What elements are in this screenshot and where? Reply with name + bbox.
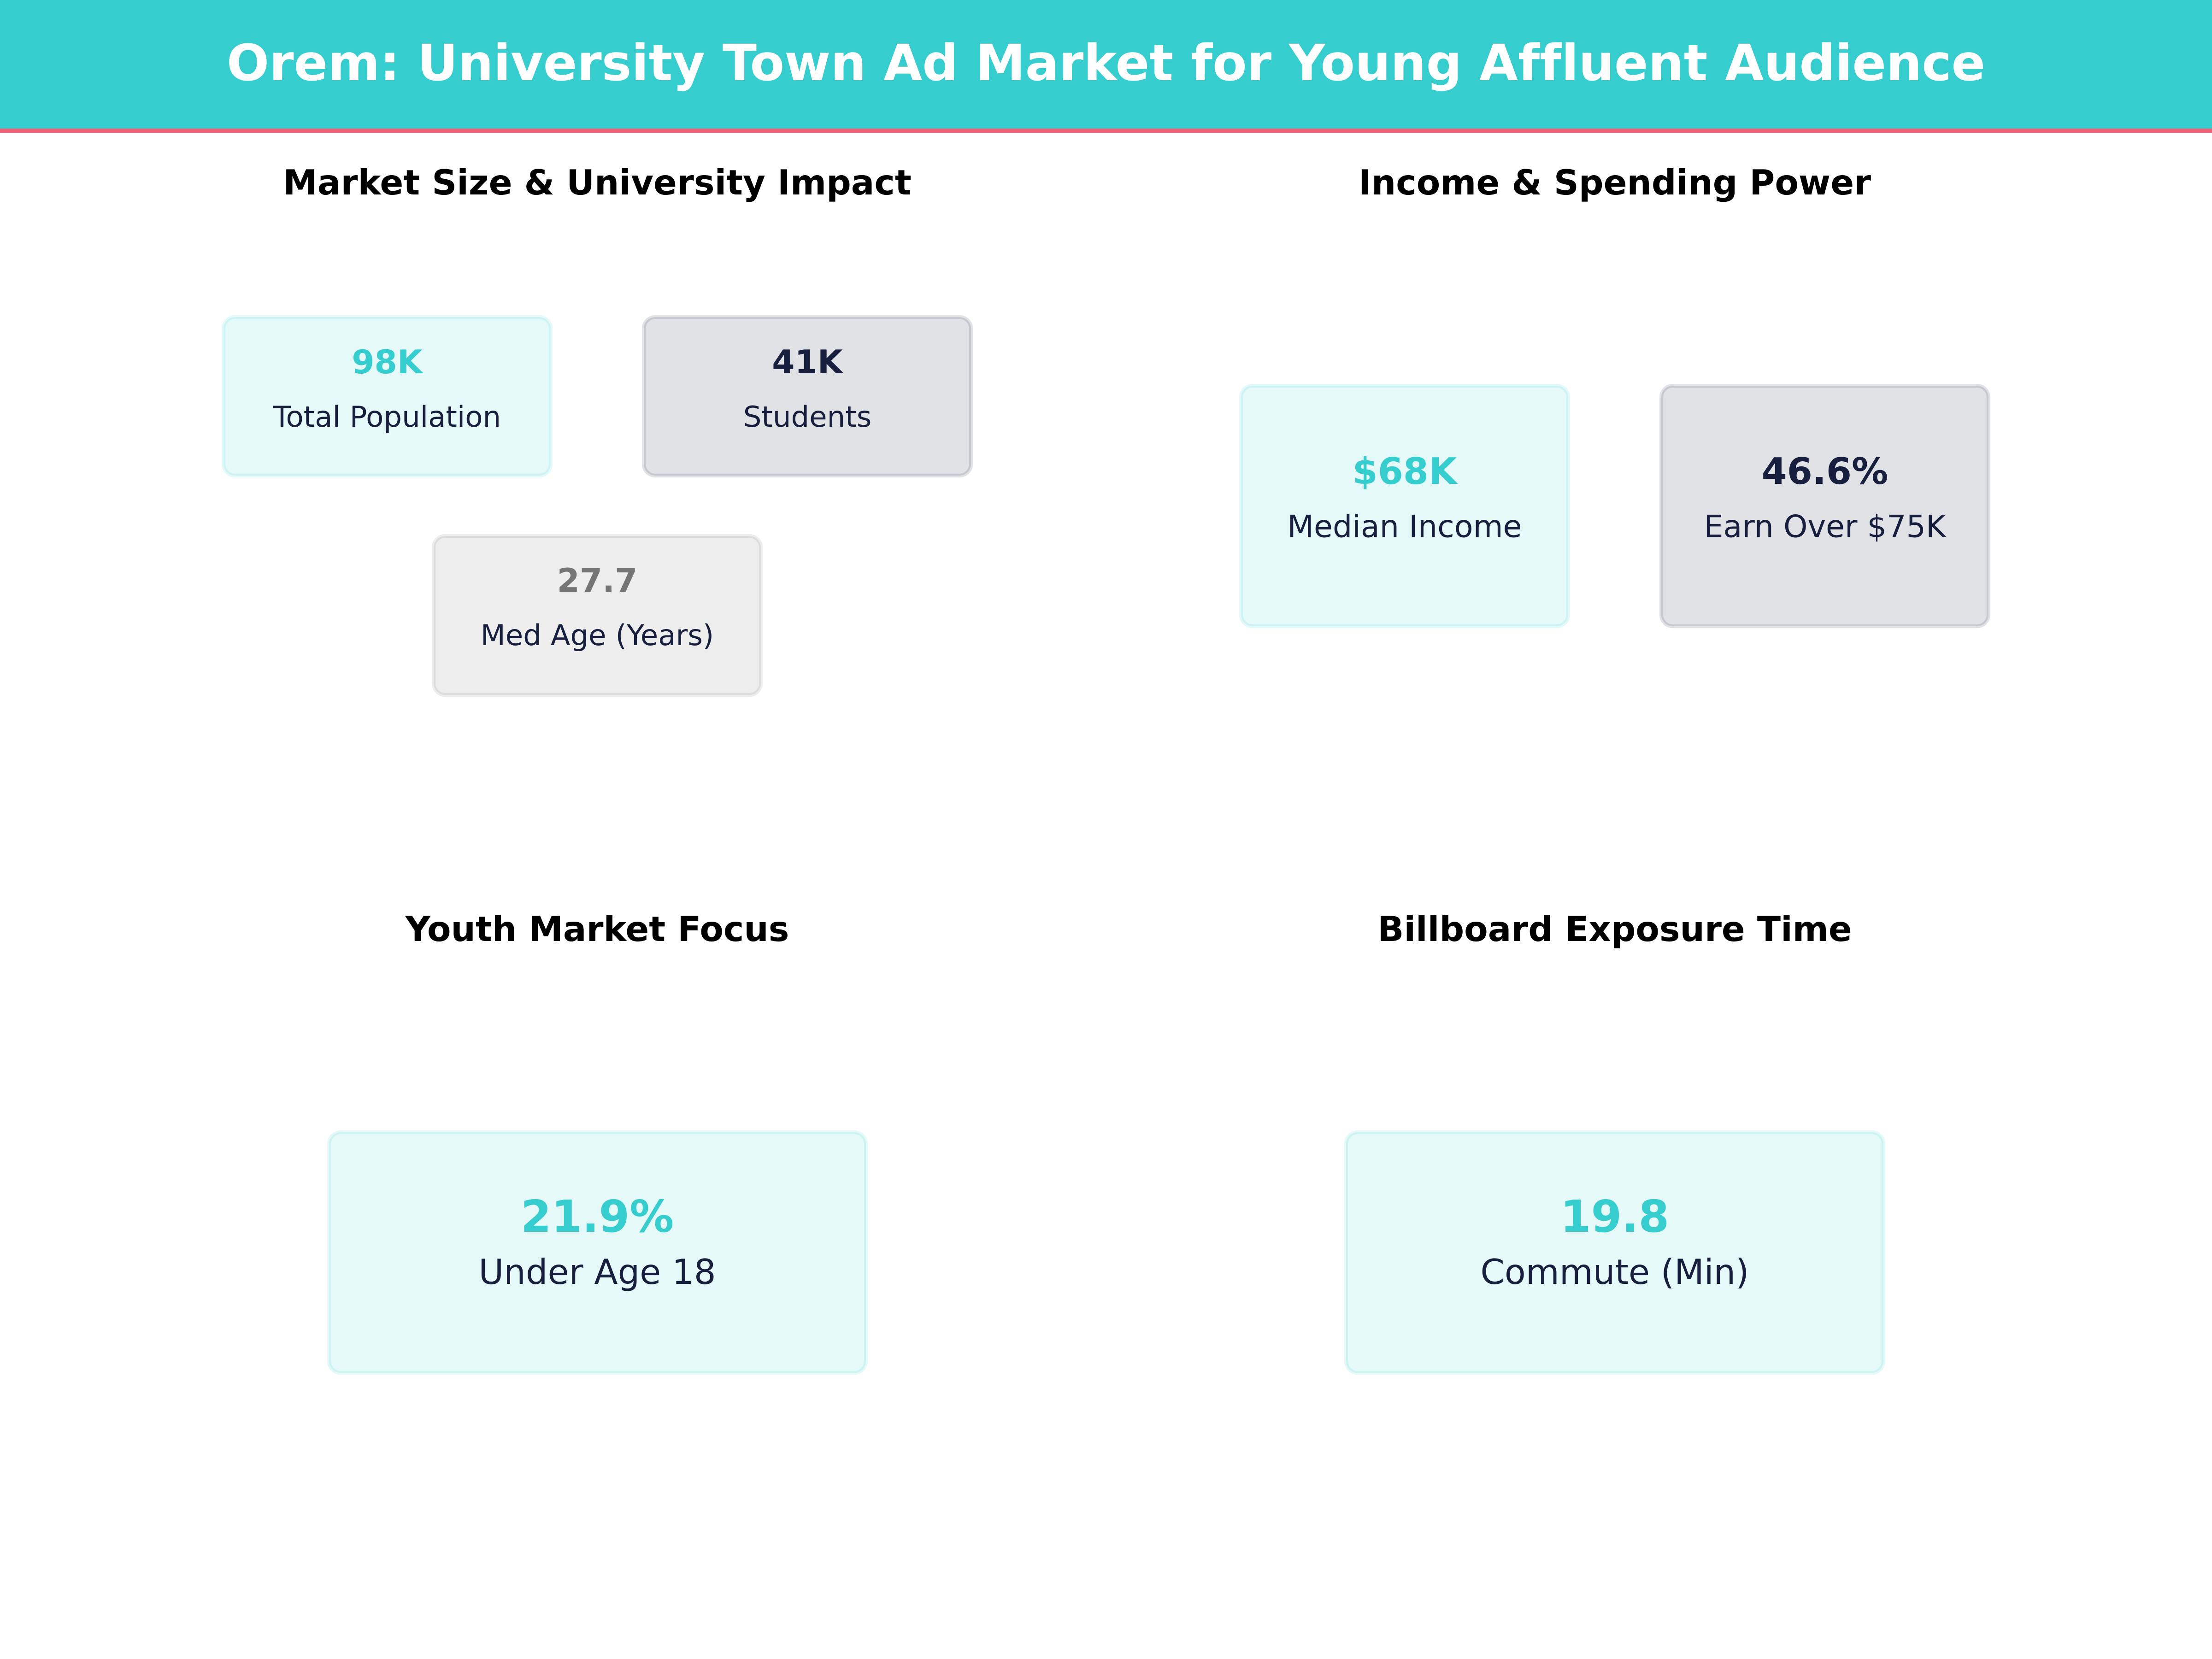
stat card: students: Students: [743, 400, 871, 434]
stat card: median age: [434, 536, 761, 695]
stat card: total population: [224, 317, 551, 476]
stat card: earn over 75K: 46.6%: [1762, 450, 1888, 493]
header banner: [0, 0, 2212, 133]
stat card: earn over 75K: [1661, 386, 1988, 626]
stat card: total population: Total Population: [273, 400, 501, 434]
stat card: commute: [1346, 1132, 1883, 1373]
stat card: total population: 98K: [352, 343, 424, 381]
stat card: students: 41K: [772, 343, 844, 381]
stat card: median age: 27.7: [557, 561, 637, 600]
stat card: students: [644, 317, 971, 476]
stat card: commute: Commute (Min): [1481, 1252, 1749, 1292]
stat card: median income: Median Income: [1287, 509, 1522, 545]
title: Orem: University Town Ad Market for Young Affluent Audience: [227, 34, 1985, 92]
stat card: median age: Med Age (Years): [481, 618, 714, 652]
heading: income: Income & Spending Power: [1359, 162, 1871, 203]
stat card: under age 18: Under Age 18: [478, 1252, 716, 1292]
panel: billboard exposure time: [1346, 909, 1883, 1373]
stat card: under age 18: 21.9%: [521, 1191, 674, 1242]
stat card: commute: 19.8: [1560, 1191, 1669, 1242]
stat card: median income: $68K: [1353, 450, 1458, 493]
panel: income and spending power: [1241, 162, 1988, 626]
stat card: earn over 75K: Earn Over $75K: [1704, 509, 1947, 545]
heading: market size: Market Size & University Impact: [283, 162, 912, 203]
heading: youth: Youth Market Focus: [405, 909, 789, 949]
panel: youth market focus: [329, 909, 866, 1373]
panel: market size and university impact: [224, 162, 971, 695]
stat card: median income: [1241, 386, 1568, 626]
stat card: under age 18: [329, 1132, 866, 1373]
heading: billboard: Billboard Exposure Time: [1377, 909, 1852, 949]
